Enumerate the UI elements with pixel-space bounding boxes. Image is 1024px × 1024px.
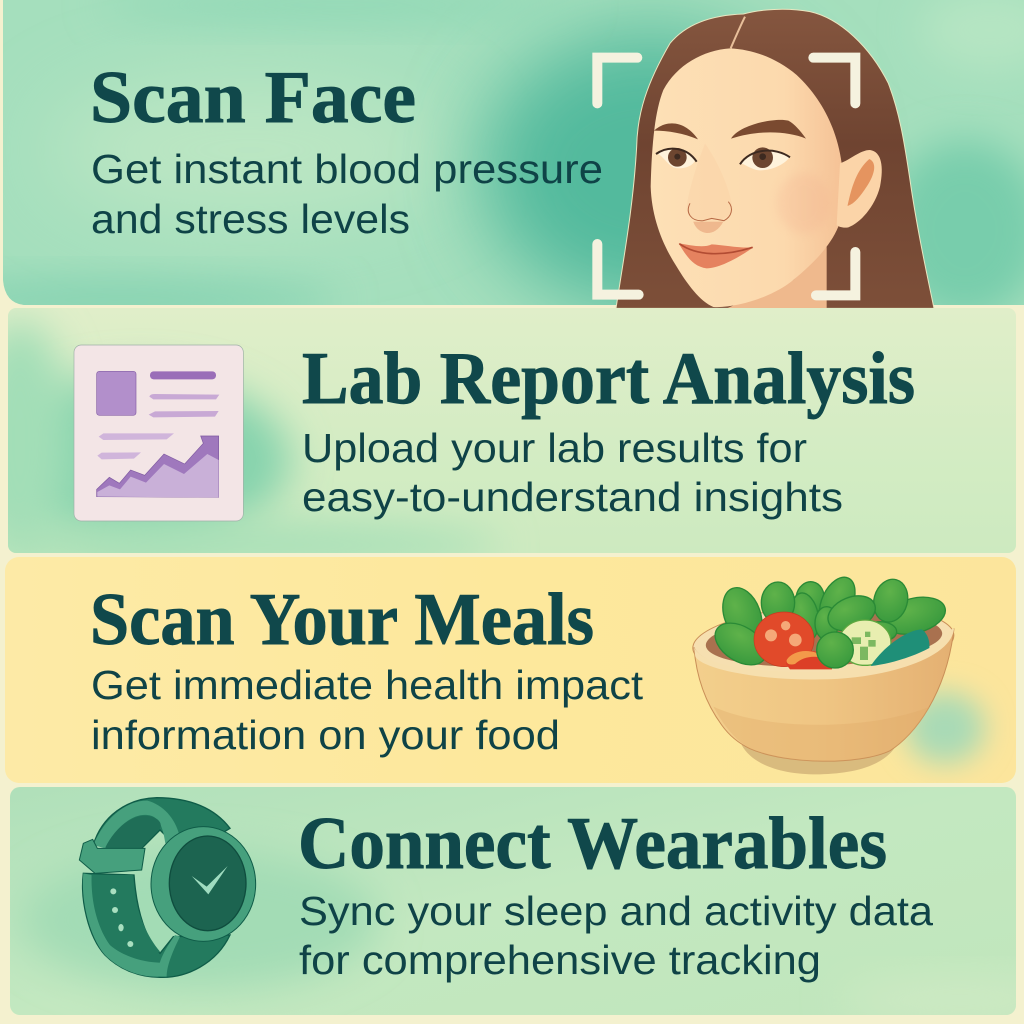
panel: connect wearables — [10, 787, 1024, 1020]
text: wearables description: for comprehensive tracking — [299, 937, 821, 983]
panel: lab report analysis — [0, 308, 1016, 570]
lower strap — [83, 873, 230, 977]
text: scan face description — [91, 146, 603, 242]
text: meals description: information on your food — [91, 712, 560, 758]
text: scan face description: and stress levels — [91, 196, 410, 242]
panel background: wearables — [10, 787, 1024, 1020]
illustration: woman's face — [597, 9, 934, 308]
panel background: lab report — [0, 308, 1016, 570]
text: meals description: Get immediate health impact — [91, 662, 644, 708]
icon: smartwatch — [79, 798, 256, 977]
panel background: scan face — [0, 0, 1024, 320]
heading: Connect Wearables: Connect Wearables — [298, 803, 887, 885]
text: meals description — [91, 662, 644, 758]
leaves — [708, 572, 949, 674]
strap loop — [79, 839, 145, 873]
text: scan face description: Get instant blood pressure — [91, 146, 603, 192]
text: lab report description — [302, 425, 843, 520]
panel background: meals — [5, 557, 1016, 783]
text: wearables description — [299, 888, 933, 983]
icon: lab report document — [74, 345, 243, 521]
upper strap — [93, 798, 230, 850]
heading: Lab Report Analysis: Lab Report Analysis — [302, 338, 915, 420]
icon: salad bowl — [691, 572, 956, 774]
panel: scan your meals — [5, 557, 1016, 783]
text: wearables description: Sync your sleep and activity data — [299, 888, 933, 934]
focus brackets — [597, 58, 855, 295]
panel: scan face — [0, 0, 1024, 320]
heading: Scan Your Meals: Scan Your Meals — [90, 579, 594, 661]
bowl body — [694, 628, 954, 761]
heading: Scan Face: Scan Face — [90, 57, 416, 139]
text: lab report description: easy-to-understand insights — [302, 474, 843, 520]
text: lab report description: Upload your lab results for — [302, 425, 807, 471]
watch case and dial — [151, 827, 256, 941]
